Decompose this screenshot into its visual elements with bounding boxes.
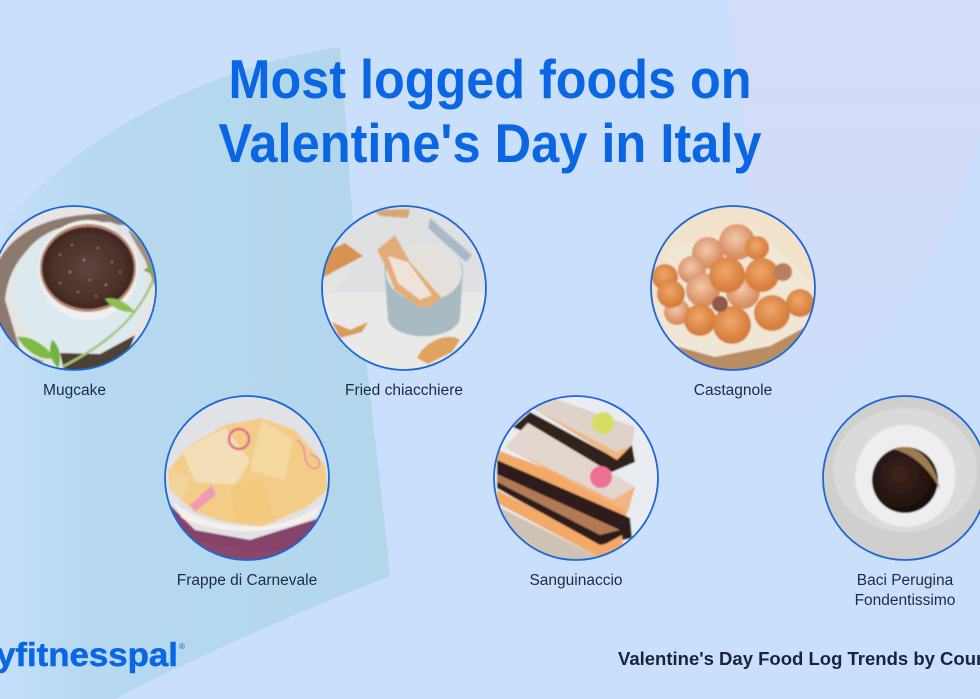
label [855,572,955,609]
logo: myfitnesspal: yfitnesspal [0,636,178,673]
photo: mugcake [0,205,160,375]
ring [651,206,815,370]
food item: Castagnole [650,205,820,399]
label: Castagnole [694,382,772,399]
food item: Baci Perugina Fondentissimo [820,395,980,609]
ring [494,396,658,560]
logo: myfitnesspal: ® [179,642,185,651]
title: Most logged foods on [228,48,752,110]
photo: fried chiacchiere [320,205,490,375]
label: Mugcake [43,382,106,399]
label: Fried chiacchiere [345,382,463,399]
photo: frappe di carnevale [166,396,328,560]
ring [823,396,980,560]
ring [165,396,329,560]
food item: Frappe di Carnevale [160,395,335,589]
background shape: lavender wave [730,0,980,445]
food item: Mugcake [0,205,160,399]
label: Frappe di Carnevale [177,572,317,589]
ring [322,206,486,370]
photo: baci perugina fondentissimo [820,395,980,565]
title: Valentine's Day in Italy [218,112,762,174]
food item: Fried chiacchiere [320,205,490,399]
label: Baci Perugina [857,572,954,589]
food item: Sanguinaccio [490,395,665,589]
photo: sanguinaccio [495,397,657,560]
title [218,48,762,174]
label: Fondentissimo [855,592,955,609]
ring [0,206,156,370]
label: Sanguinaccio [529,572,623,589]
photo: castagnole [650,205,820,375]
background shape: teal wave [0,47,390,699]
